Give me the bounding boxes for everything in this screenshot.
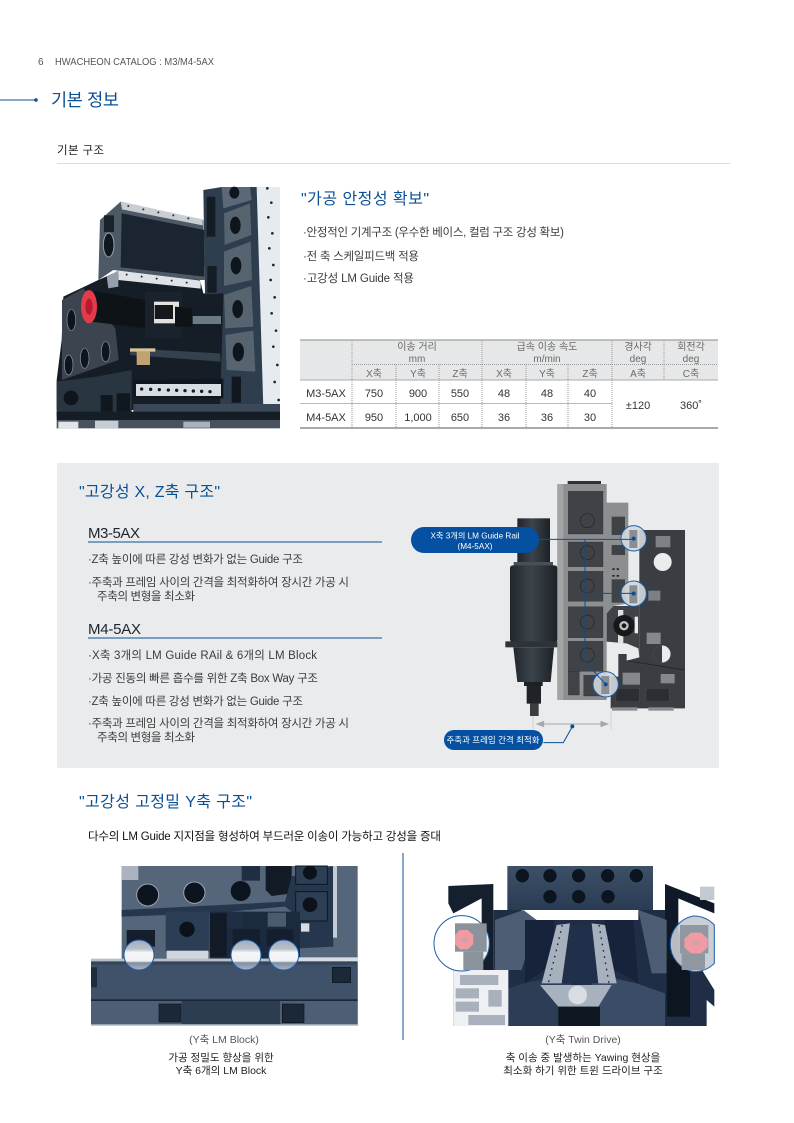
specification table: deg <box>683 354 699 365</box>
callout: X axis LM guide rail: X축 3개의 LM Guide Rail <box>430 530 520 540</box>
specification table: M3-5AX <box>306 388 347 400</box>
twin drive motor right <box>670 916 714 972</box>
specification table: m/min <box>533 354 561 365</box>
specification table: Z축 <box>452 368 468 380</box>
panel: high rigidity X, Z axis <box>57 463 719 768</box>
specification table: 40 <box>584 388 596 400</box>
highlighted LM blocks <box>124 940 299 970</box>
description: Y axis: 다수의 LM Guide 지지점을 형성하여 부드러운 이송이 가능하고 강성을 증대 <box>88 829 441 843</box>
specification table: 550 <box>451 388 469 400</box>
bullet list: stability: ·고강성 LM Guide 적용 <box>303 272 414 285</box>
block: M3-5AX: ·주축과 프레임 사이의 간격을 최적화하여 장시간 가공 시 <box>88 575 349 589</box>
spindle <box>505 518 557 716</box>
subheading: basic structure: 기본 구조 <box>57 144 104 157</box>
specification table: 900 <box>409 388 427 400</box>
specification table: X축 <box>496 368 512 380</box>
specification table: 경사각 <box>624 340 652 353</box>
specification table: Y축 <box>410 368 426 380</box>
bullet list: stability: ·안정적인 기계구조 (우수한 베이스, 컬럼 구조 강성 확보) <box>303 226 564 239</box>
block: M3-5AX: M3-5AX <box>88 525 140 542</box>
specification table: 1,000 <box>404 412 432 424</box>
column <box>557 481 639 700</box>
photo: machine structure <box>57 187 280 428</box>
block: M3-5AX: 주축의 변형을 최소화 <box>97 590 195 603</box>
block: M3-5AX <box>88 525 382 603</box>
photo: Y axis twin drive <box>434 866 714 1026</box>
block: M4-5AX: ·주축과 프레임 사이의 간격을 최적화하여 장시간 가공 시 <box>88 716 349 730</box>
specification table: 이송 거리 <box>397 341 437 353</box>
caption: Y axis twin drive: (Y축 Twin Drive) <box>545 1034 621 1046</box>
specification table: 36 <box>498 412 510 424</box>
block: M4-5AX: M4-5AX <box>88 621 141 638</box>
caption: Y axis twin drive <box>503 1034 663 1077</box>
specification table: 750 <box>365 388 383 400</box>
callout: X axis LM guide rail <box>411 527 539 553</box>
caption: Y axis twin drive: 축 이송 중 발생하는 Yawing 현상을 <box>506 1051 661 1064</box>
caption: Y axis LM block: Y축 6개의 LM Block <box>176 1065 267 1077</box>
heading: Y axis structure: "고강성 고정밀 Y축 구조" <box>79 793 252 811</box>
heading: X, Z axis structure: "고강성 X, Z축 구조" <box>79 483 220 501</box>
specification table: X축 <box>366 368 382 380</box>
title: 기본 정보 <box>51 90 119 110</box>
specification table: 650 <box>451 412 469 424</box>
specification table: deg <box>630 354 646 365</box>
block: M4-5AX: ·X축 3개의 LM Guide RAil & 6개의 LM Block <box>88 649 317 662</box>
specification table: 30 <box>584 412 596 424</box>
specification table: Y축 <box>539 368 555 380</box>
frame body <box>611 530 685 711</box>
block: M3-5AX: ·Z축 높이에 따른 강성 변화가 없는 Guide 구조 <box>88 553 303 566</box>
block: M4-5AX: 주축의 변형을 최소화 <box>97 731 195 744</box>
caption: Y axis LM block: (Y축 LM Block) <box>189 1034 259 1046</box>
page header: 6 <box>38 57 44 68</box>
page header: HWACHEON CATALOG : M3/M4-5AX <box>55 57 214 68</box>
specification table: 950 <box>365 412 383 424</box>
specification table: ±120 <box>626 400 650 412</box>
block: M4-5AX: ·Z축 높이에 따른 강성 변화가 없는 Guide 구조 <box>88 695 303 708</box>
specification table: 48 <box>498 388 510 400</box>
diagram: spindle and frame cross-section <box>505 481 685 743</box>
callout: spindle frame gap <box>444 730 543 750</box>
bullet list: stability <box>303 226 564 285</box>
callout: spindle frame gap: 주축과 프레임 간격 최적화 <box>446 735 540 745</box>
specification table: 36 <box>541 412 553 424</box>
caption: Y axis twin drive: 최소화 하기 위한 트윈 드라이브 구조 <box>503 1064 663 1077</box>
specification table: Z축 <box>582 368 598 380</box>
twin drive motor left <box>434 916 489 971</box>
specification table: 급속 이송 속도 <box>517 341 577 353</box>
caption: Y axis LM block <box>168 1034 274 1077</box>
specification table: A축 <box>630 368 646 380</box>
block: M4-5AX <box>88 621 382 744</box>
specification table: M4-5AX <box>306 412 347 424</box>
specification table: C축 <box>683 368 699 380</box>
specification table: 360˚ <box>680 400 702 412</box>
block: M4-5AX: ·가공 진동의 빠른 흡수를 위한 Z축 Box Way 구조 <box>88 671 318 685</box>
detail circles: LM guide rails <box>593 526 646 697</box>
specification table: mm <box>409 354 425 365</box>
callout: X axis LM guide rail: (M4-5AX) <box>457 542 493 551</box>
caption: Y axis LM block: 가공 정밀도 향상을 위한 <box>168 1051 274 1064</box>
divider between Y axis photos <box>402 853 404 1040</box>
heading: machining stability: "가공 안정성 확보" <box>301 190 429 208</box>
specification table: 48 <box>541 388 553 400</box>
section marker line <box>0 98 38 102</box>
specification table <box>300 340 718 428</box>
specification table: 회전각 <box>677 341 705 353</box>
bullet list: stability: ·전 축 스케일피드백 적용 <box>303 249 419 263</box>
clearance dimension arrow <box>533 711 611 729</box>
photo: Y axis LM block <box>91 866 358 1026</box>
leader lines <box>537 539 634 684</box>
